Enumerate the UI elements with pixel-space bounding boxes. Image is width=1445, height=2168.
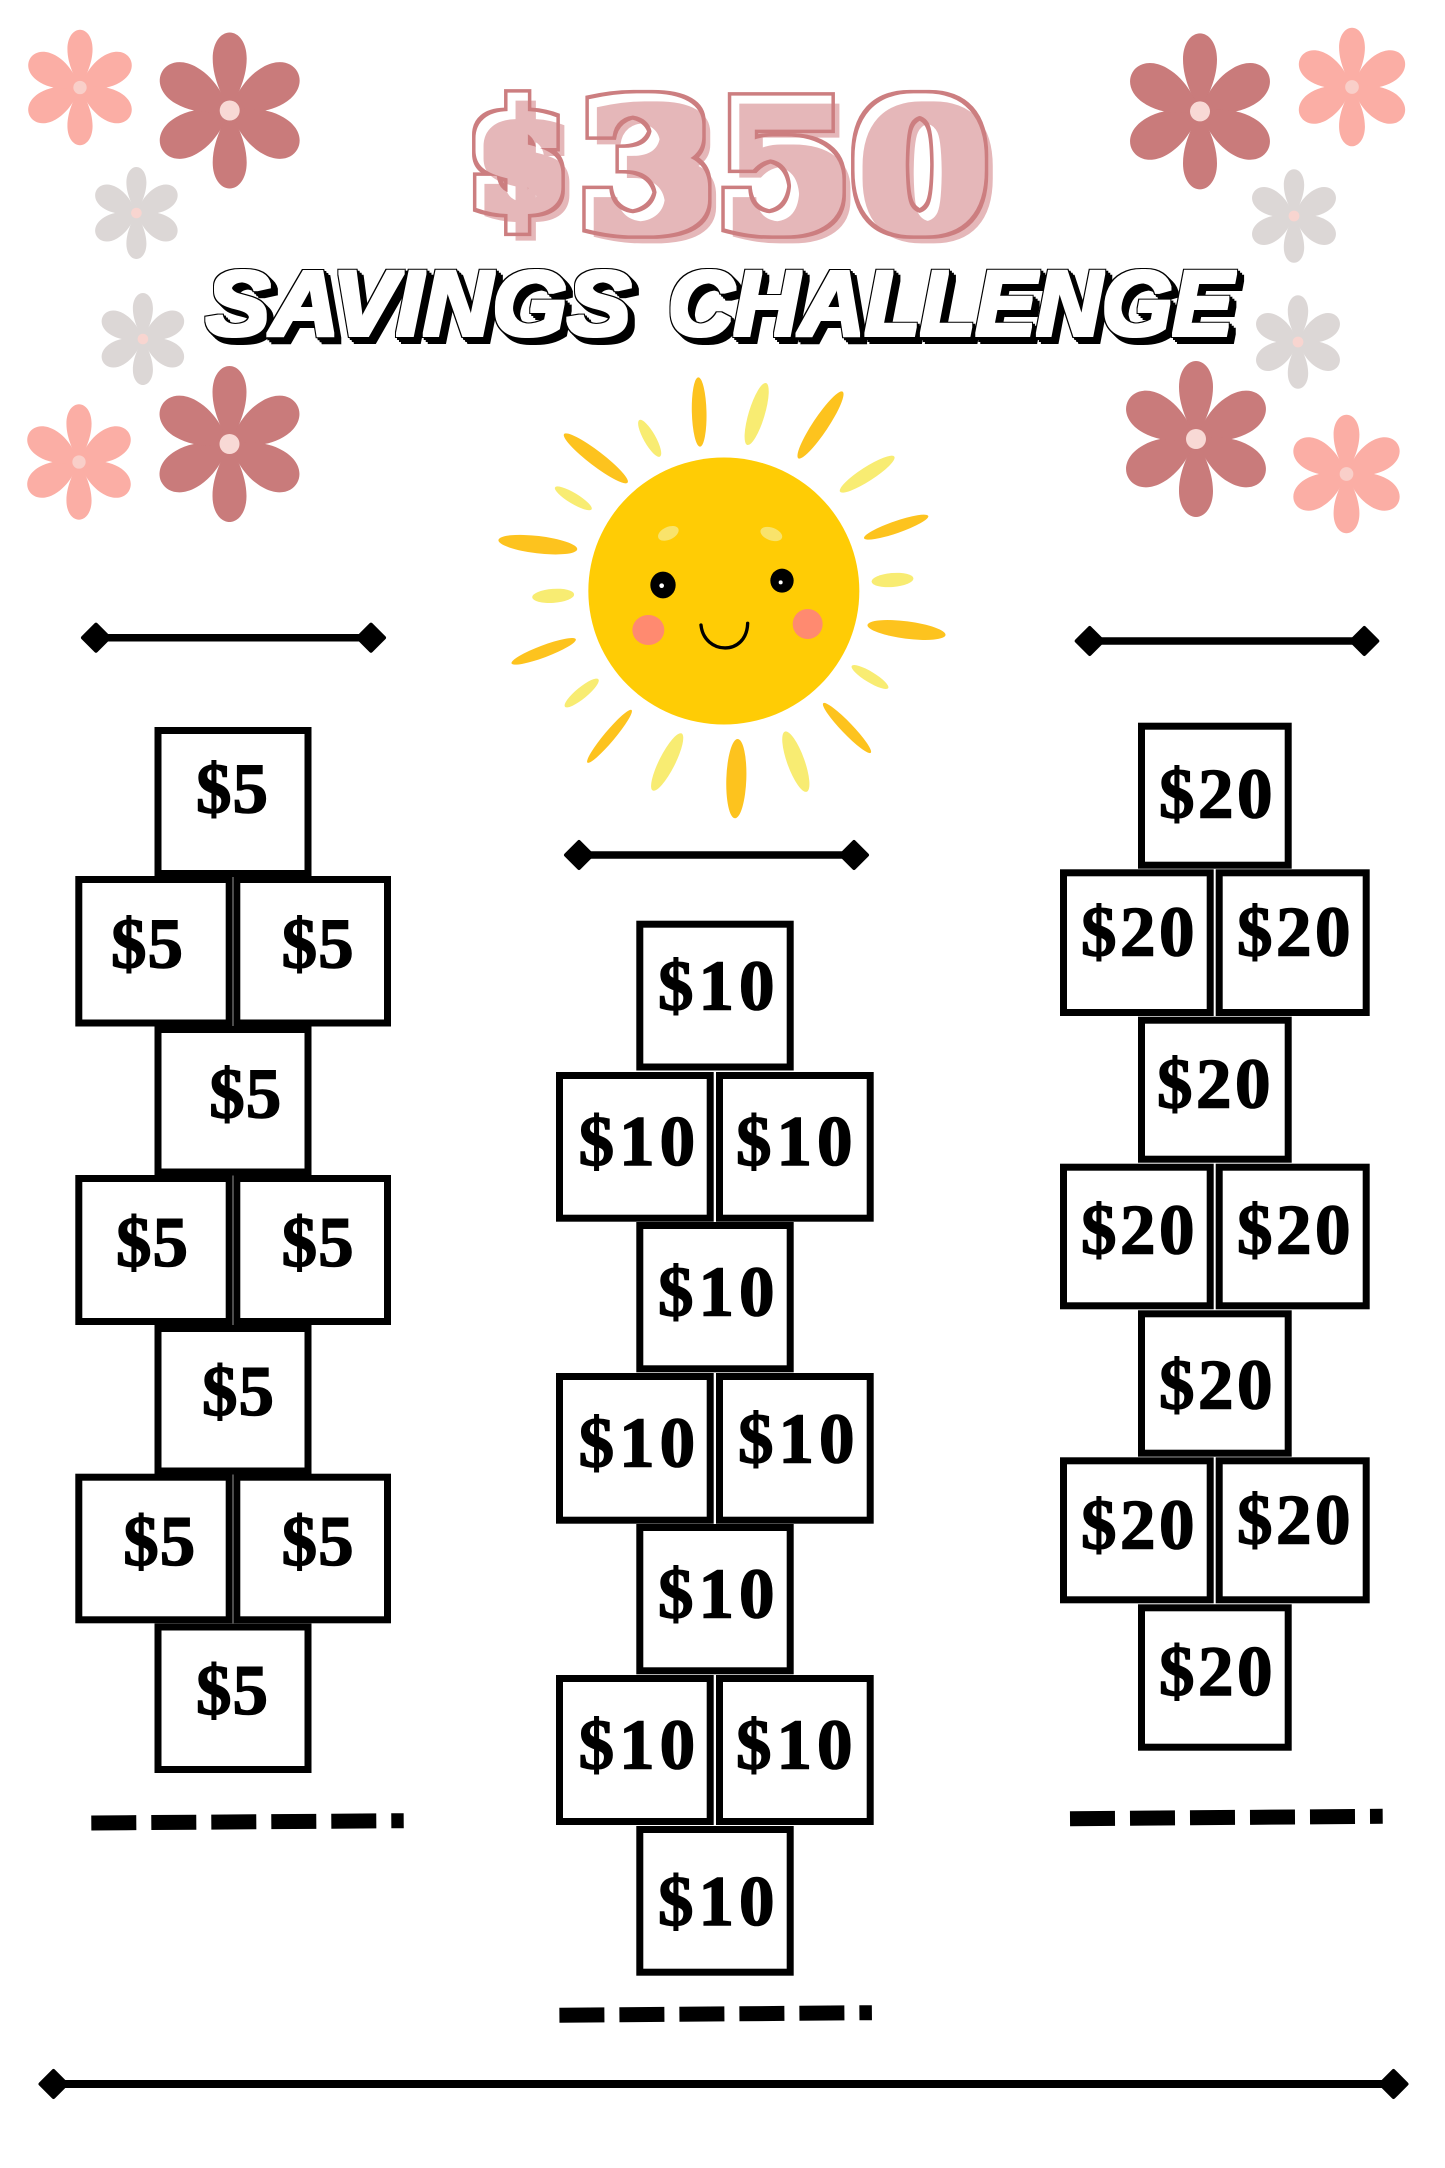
- box: [1142, 1314, 1288, 1453]
- box: [1219, 1167, 1366, 1306]
- bottom line with diamond ends: [40, 2071, 1406, 2097]
- box: [1142, 726, 1288, 865]
- box: [79, 1477, 229, 1620]
- box: $10: [579, 1103, 700, 1181]
- box: $5: [196, 1652, 269, 1730]
- title: savings challenge: [206, 253, 1236, 355]
- box: [237, 880, 388, 1023]
- box: [1142, 1020, 1288, 1159]
- flower: top left pink: [22, 30, 138, 145]
- flower: lower left grey: [97, 293, 189, 385]
- column: $5: [79, 625, 404, 1823]
- box: [1142, 1608, 1288, 1747]
- box: $20: [1237, 1481, 1354, 1559]
- box: [158, 1030, 308, 1172]
- box: $10: [658, 1254, 780, 1332]
- title: $350: 350: [578, 65, 988, 268]
- box: [158, 1627, 308, 1770]
- box: $5: [282, 1204, 355, 1282]
- box: $5: [209, 1056, 282, 1134]
- title: savings challenge: SAVINGS: [206, 253, 631, 355]
- box: $20: [1157, 1045, 1274, 1123]
- flower: lower left rose: [151, 366, 308, 522]
- box: $5: [116, 1204, 189, 1282]
- dashed total line: $5 column: [91, 1821, 404, 1823]
- flower: upper right grey: [1247, 169, 1341, 263]
- flower: lower right rose: [1118, 361, 1274, 517]
- box: [1064, 873, 1210, 1012]
- sun rays: [497, 377, 947, 819]
- box: [720, 1376, 870, 1520]
- column: $10: [559, 842, 872, 2015]
- box: $20: [1237, 893, 1354, 971]
- box: [640, 1830, 790, 1972]
- box: [1064, 1167, 1210, 1306]
- dashed total line: $20 column: [1070, 1816, 1383, 1819]
- flower: top left rose: [152, 32, 308, 188]
- header line: $5 column: [83, 625, 384, 651]
- box: $20: [1081, 1486, 1198, 1564]
- sun face: [632, 523, 823, 648]
- box: $10: [658, 1555, 780, 1633]
- box: $20: [1159, 1346, 1276, 1424]
- box: [560, 1076, 710, 1218]
- sun disc: [588, 457, 859, 724]
- box: $10: [579, 1706, 700, 1784]
- flower: lower left pink: [21, 404, 137, 520]
- box: [640, 1528, 790, 1671]
- column: $20: [1064, 628, 1383, 1819]
- title: savings challenge: CHALLENGE: [668, 253, 1236, 355]
- box: [560, 1376, 710, 1520]
- box: $5: [196, 751, 269, 829]
- flower: top right pink: [1293, 28, 1411, 146]
- box: $10: [658, 1863, 780, 1941]
- box: [720, 1076, 870, 1218]
- box: [560, 1678, 710, 1822]
- box: $5: [282, 1503, 355, 1581]
- box: [1064, 1461, 1210, 1600]
- title: $350: [469, 65, 988, 268]
- box: $20: [1081, 893, 1198, 971]
- box: [640, 924, 790, 1067]
- box: [1219, 873, 1366, 1012]
- box: $5: [111, 905, 184, 983]
- title: $350: $: [469, 75, 567, 240]
- box: $5: [123, 1503, 196, 1581]
- box: [640, 1226, 790, 1369]
- box: $20: [1159, 755, 1276, 833]
- box: [79, 880, 229, 1023]
- header line: $10 column: [566, 842, 867, 868]
- header line: $20 column: [1077, 628, 1377, 654]
- box: $20: [1237, 1191, 1354, 1269]
- flower: upper left grey: [90, 167, 182, 259]
- icon: smiling sun: [497, 377, 947, 819]
- dashed total line: $10 column: [559, 2013, 872, 2015]
- box: [79, 1178, 229, 1322]
- box: $20: [1159, 1633, 1276, 1711]
- flower: top right rose: [1122, 33, 1278, 189]
- box: $5: [202, 1353, 275, 1431]
- box: $10: [738, 1400, 860, 1478]
- box: $10: [579, 1405, 700, 1483]
- box: [158, 1328, 308, 1471]
- box: $5: [282, 905, 355, 983]
- box: [237, 1178, 388, 1322]
- box: $10: [736, 1706, 858, 1784]
- flower: lower right pink: [1287, 415, 1406, 533]
- box: $10: [736, 1103, 858, 1181]
- box: [237, 1477, 388, 1620]
- box: [158, 730, 308, 874]
- flower: lower right grey: [1251, 295, 1345, 389]
- box: $10: [658, 947, 780, 1025]
- box: [720, 1678, 870, 1822]
- box: $20: [1081, 1191, 1198, 1269]
- box: [1219, 1461, 1366, 1600]
